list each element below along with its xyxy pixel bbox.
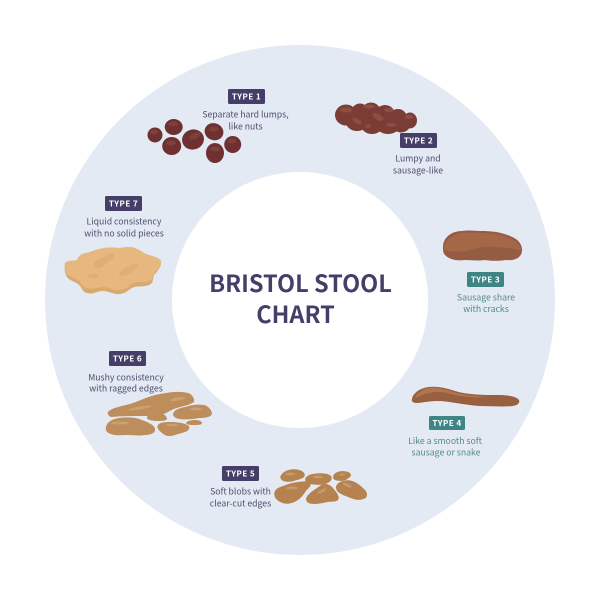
type 2 group [335, 102, 443, 176]
type 4 badge: TYPE 4 [432, 417, 462, 429]
type 7 badge: TYPE 7 [109, 197, 138, 209]
title line 2: CHART [256, 296, 335, 330]
type 2 description: Lumpy and [395, 152, 441, 164]
type 5 description: clear-cut edges [210, 496, 271, 510]
type 1 description [202, 108, 289, 132]
type 2 description [393, 152, 443, 176]
title: BRISTOL STOOL [209, 265, 392, 299]
type 1 group [148, 89, 289, 163]
type 6 description: with ragged edges [89, 382, 163, 394]
type 5 badge: TYPE 5 [226, 467, 255, 479]
type 1 badge [228, 89, 265, 104]
type 1 badge: TYPE 1 [232, 90, 261, 102]
type 4 description [408, 434, 483, 458]
type 7 description: with no solid pieces [84, 226, 164, 240]
type 7 description [84, 214, 164, 240]
type 5 description [210, 484, 271, 510]
ring background [45, 45, 555, 555]
type 3 badge: TYPE 3 [471, 273, 500, 285]
type 5 group [210, 466, 366, 510]
type 6 description: Mushy consistency [88, 370, 164, 384]
type 3 description [457, 290, 515, 315]
type 4 illustration: smooth snake [412, 387, 519, 406]
type 2 illustration: lumpy sausage [335, 102, 417, 134]
type 7 group [65, 196, 164, 294]
type 1 illustration: hard lumps [148, 119, 241, 163]
type 6 badge: TYPE 6 [113, 352, 142, 364]
type 3 group [443, 231, 522, 315]
type 6 description [88, 370, 164, 394]
type 5 illustration: soft blobs [275, 470, 366, 503]
type 6 illustration: mushy pieces [106, 392, 212, 436]
type 4 group [408, 387, 519, 458]
type 5 badge [222, 466, 259, 481]
type 7 illustration: liquid puddle [65, 247, 161, 294]
type 2 badge: TYPE 2 [404, 134, 433, 146]
type 5 description: Soft blobs with [210, 484, 271, 498]
type 6 group [88, 351, 212, 436]
type 1 description: Separate hard lumps, [202, 108, 289, 120]
type 4 description: sausage or snake [412, 446, 481, 458]
type 7 description: Liquid consistency [87, 214, 162, 228]
type 1 description: like nuts [228, 120, 263, 132]
type 2 description: sausage-like [393, 164, 443, 176]
type 3 description: with cracks [463, 302, 509, 315]
type 3 description: Sausage share [457, 290, 515, 304]
type 3 illustration: cracked sausage [443, 231, 522, 261]
type 4 description: Like a smooth soft [408, 434, 483, 447]
